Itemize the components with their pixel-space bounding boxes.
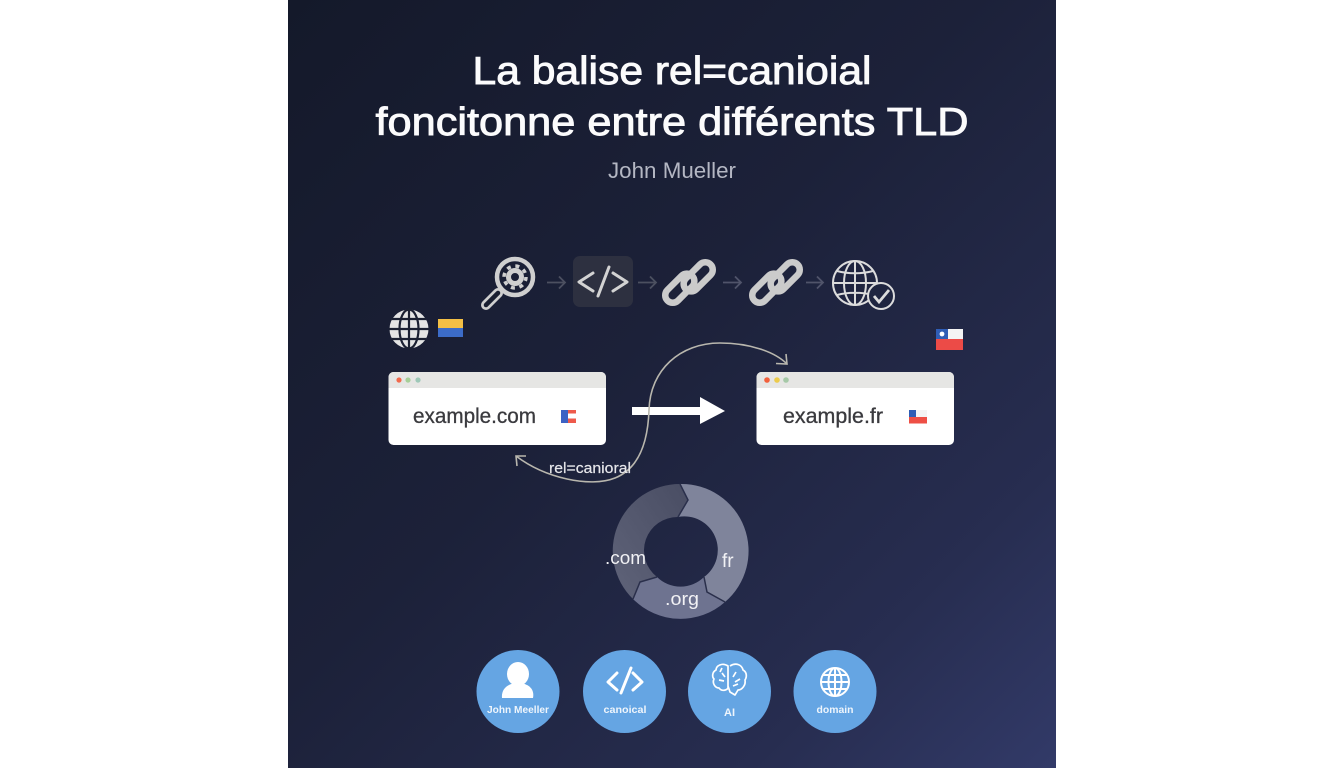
icon: chain link 2 — [749, 256, 803, 309]
icon: globe with check — [833, 261, 894, 309]
badge: domain — [794, 650, 876, 733]
title: foncitonne entre différents TLD — [376, 101, 968, 144]
arrow: step 4 — [806, 276, 823, 288]
badge: canonical — [583, 650, 666, 733]
arrow: curved rel=canonical link — [516, 343, 787, 482]
donut chart: TLD segments — [605, 484, 749, 619]
icon: globe left — [389, 309, 429, 349]
arrow: step 2 — [638, 276, 656, 288]
label: rel=canonical: rel=canioral — [549, 461, 631, 477]
badge: canonical: canoical — [604, 704, 647, 716]
flag: yellow and blue — [438, 319, 463, 337]
browser card: example.com: example.com — [413, 405, 536, 428]
arrow: large white — [632, 397, 725, 424]
browser card: example.fr: example.fr — [783, 405, 883, 428]
donut chart: TLD segments: .com — [605, 548, 646, 568]
badge: John Mueller — [476, 650, 560, 733]
badge: AI — [688, 650, 771, 733]
donut chart: TLD segments: fr — [722, 551, 734, 572]
browser card: example.fr — [756, 372, 954, 445]
subtitle: author: John Mueller — [608, 158, 736, 183]
arrow: step 3 — [723, 276, 741, 288]
panel: dark background — [288, 0, 1056, 768]
badge: John Mueller: John Meeller — [487, 704, 549, 716]
title: La balise rel=canioial — [472, 50, 872, 93]
arrow: step 1 — [547, 276, 565, 288]
icon: magnifier with gear — [486, 259, 533, 305]
title — [376, 50, 968, 144]
browser card: example.com — [388, 372, 606, 445]
badge: domain: domain — [816, 704, 854, 716]
icon: code box — [573, 256, 633, 307]
icon: chain link 1 — [662, 256, 716, 309]
badge: AI: AI — [724, 707, 735, 719]
flag: right large — [936, 329, 963, 350]
donut chart: TLD segments: .org — [665, 589, 699, 609]
